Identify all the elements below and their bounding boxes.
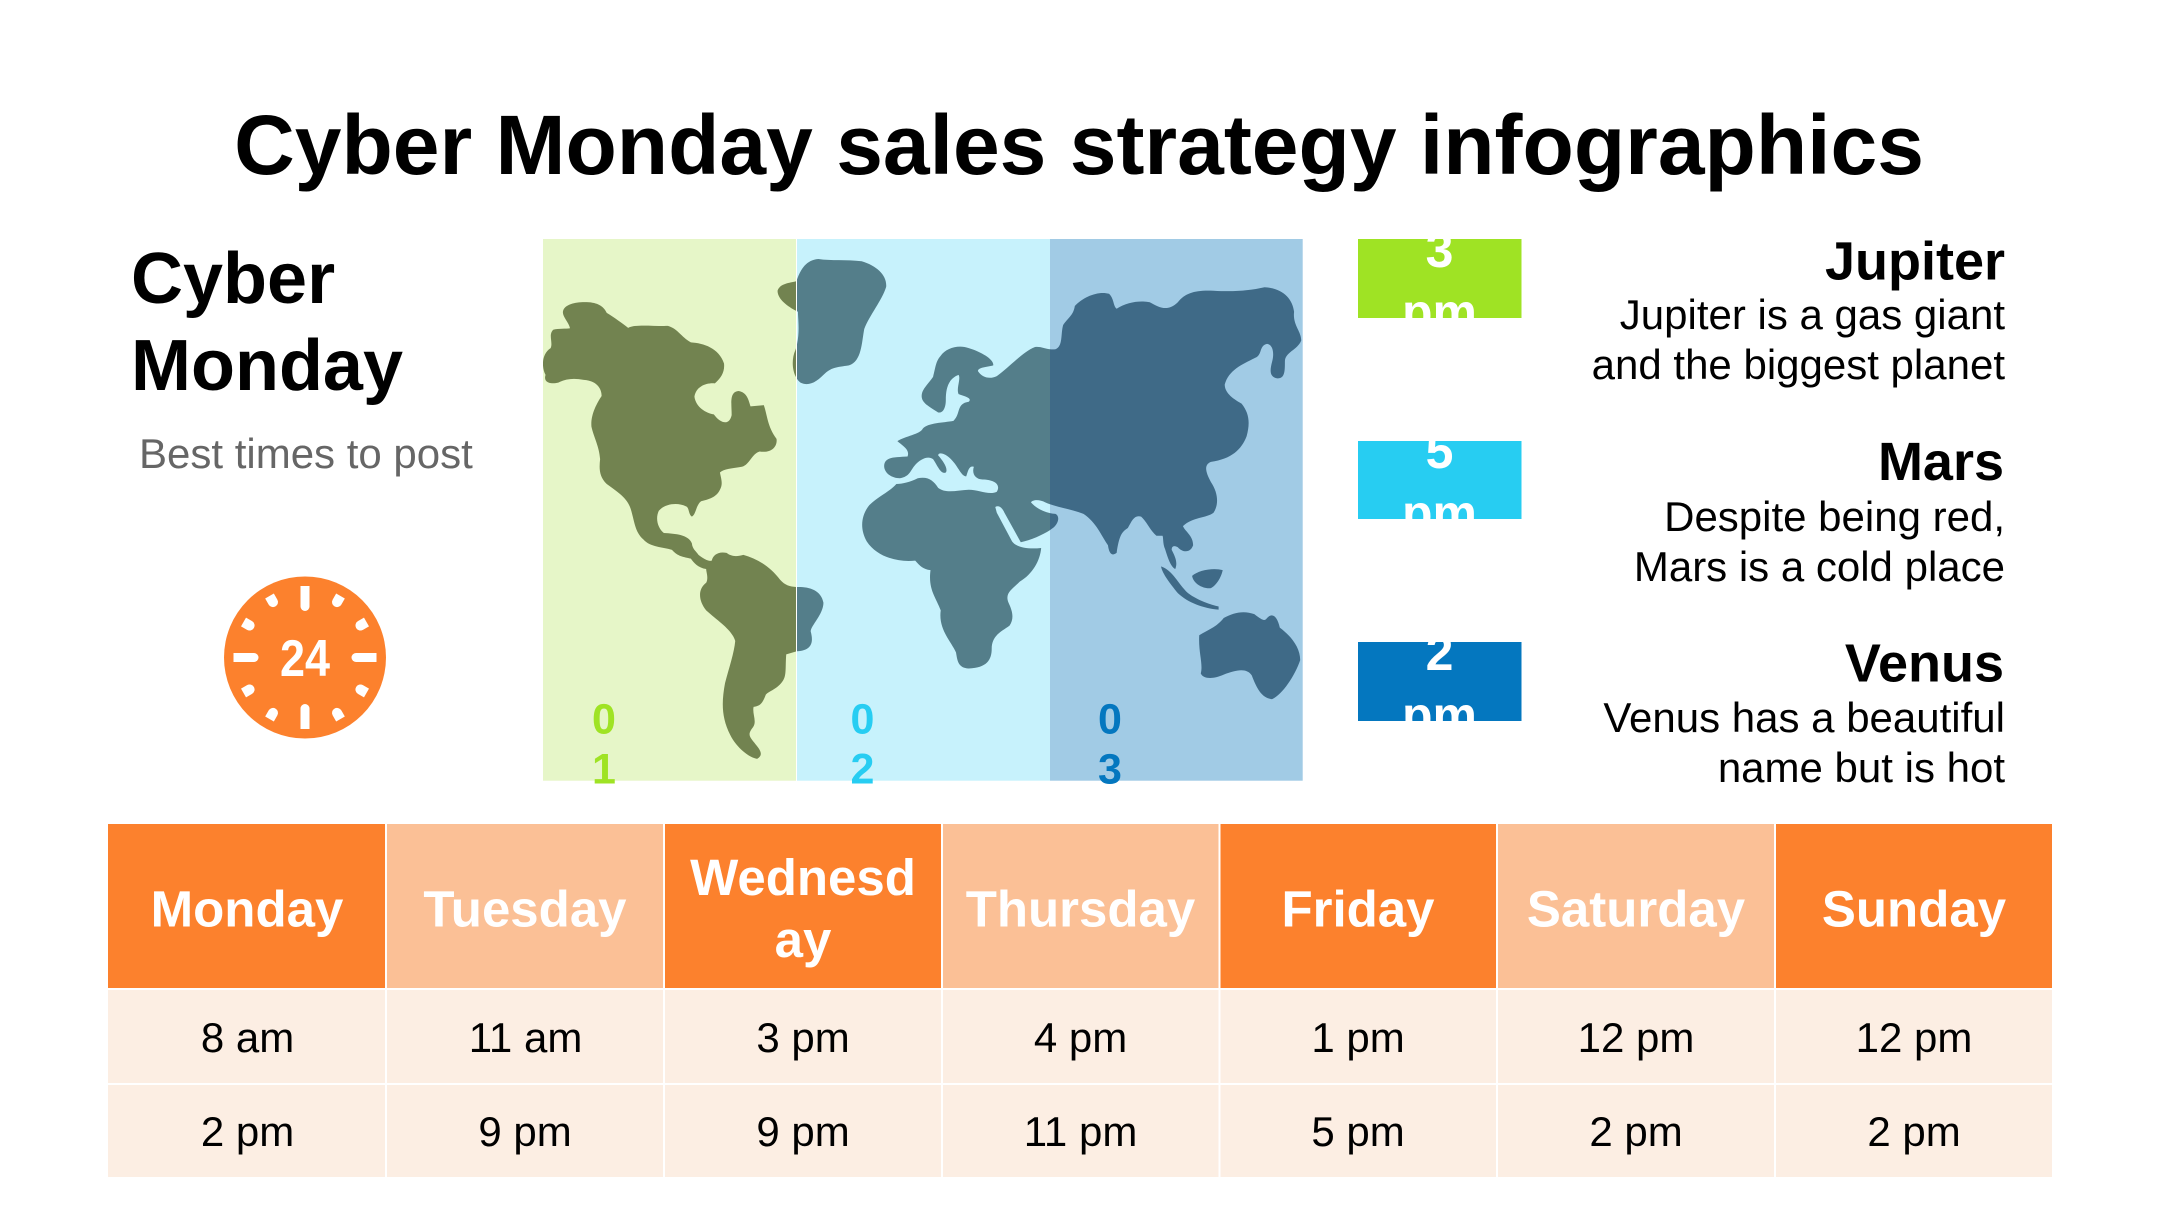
column: Thursday — [943, 824, 1218, 1177]
time tag: 2 pm — [1358, 642, 1522, 721]
column: Tuesday: Tuesday — [423, 880, 627, 938]
panel: Mars — [1358, 441, 2004, 590]
column: Wednesday: 3 pm — [756, 1014, 850, 1061]
heading: Cyber Monday: Monday — [131, 326, 403, 406]
column: Friday — [1220, 824, 1496, 1177]
column: Friday: Friday — [1281, 880, 1435, 938]
column: Wednesday — [665, 824, 941, 1177]
column: Tuesday — [387, 824, 663, 1177]
subtitle: best times to post: Best times to post — [139, 430, 473, 477]
zone label 01: 0 — [592, 696, 616, 744]
column: Wednesday: ay — [775, 911, 832, 968]
column: Wednesday: 9 pm — [756, 1108, 850, 1155]
Venus description: name but is hot — [1718, 744, 2005, 791]
column: Saturday — [1498, 824, 1774, 1177]
column: Sunday: 12 pm — [1856, 1014, 1972, 1061]
column: Friday: 5 pm — [1311, 1108, 1405, 1155]
Mars description: Mars is a cold place — [1634, 543, 2005, 590]
time tag: 5 pm — [1358, 441, 1522, 519]
column: Wednesday: Wednesd — [690, 849, 916, 906]
column: Sunday — [1776, 824, 2052, 1177]
Mars name: Mars — [1878, 432, 2004, 492]
time tag: 5 pm: pm — [1402, 485, 1477, 541]
time tag: 5 pm: 5 — [1426, 423, 1453, 479]
column: Saturday: 2 pm — [1589, 1108, 1683, 1155]
column: Monday: Monday — [151, 880, 344, 938]
time tag: 2 pm: 2 — [1426, 625, 1453, 681]
world map: zone 01 part — [543, 281, 796, 759]
column: Tuesday: 11 am — [469, 1014, 582, 1061]
column: Monday — [108, 824, 385, 1177]
column: Friday: 1 pm — [1311, 1014, 1405, 1061]
zone label 02: 2 — [851, 746, 874, 794]
column: Saturday: 12 pm — [1578, 1014, 1694, 1061]
Mars description: Despite being red, — [1664, 493, 2005, 540]
column: Sunday: 2 pm — [1867, 1108, 1961, 1155]
time tag: 3 pm: 3 — [1426, 222, 1453, 278]
panel: Jupiter — [1358, 239, 2005, 388]
icon: 24 hour clock — [224, 576, 386, 738]
title: Cyber Monday sales strategy infographics — [234, 98, 1924, 192]
time tag: 3 pm: pm — [1402, 284, 1477, 340]
zone strip 02 — [797, 239, 1050, 781]
panel: world map with time zones — [543, 239, 1303, 794]
panel: Venus — [1358, 642, 2005, 782]
zone strip 01 — [543, 239, 796, 781]
column: Tuesday: 9 pm — [478, 1108, 572, 1155]
Jupiter description: Jupiter is a gas giant — [1620, 291, 2005, 338]
world map: zone 03 part — [1050, 287, 1302, 700]
icon: 24 hour clock: 24 — [280, 630, 330, 688]
column: Saturday: Saturday — [1527, 880, 1746, 938]
column: Monday: 2 pm — [201, 1108, 294, 1155]
Jupiter description: and the biggest planet — [1592, 341, 2005, 388]
Jupiter name: Jupiter — [1825, 232, 2005, 292]
zone label 02: 0 — [851, 696, 874, 744]
Venus name: Venus — [1845, 634, 2004, 694]
zone label 03: 3 — [1098, 746, 1122, 794]
table: best posting times per weekday — [108, 824, 2052, 1177]
zone label 01: 1 — [592, 746, 616, 794]
column: Sunday: Sunday — [1822, 880, 2007, 938]
Venus description: Venus has a beautiful — [1603, 694, 2005, 741]
heading: Cyber Monday: Cyber — [131, 239, 335, 319]
world map: zone 02 part — [797, 259, 1050, 668]
zone label 03: 0 — [1098, 696, 1122, 744]
zone strip 03 — [1050, 239, 1303, 781]
time tag: 2 pm: pm — [1402, 687, 1477, 743]
time tag: 3 pm — [1358, 239, 1522, 318]
column: Monday: 8 am — [201, 1014, 294, 1061]
column: Thursday: Thursday — [966, 880, 1196, 938]
column: Thursday: 11 pm — [1024, 1108, 1137, 1155]
column: Thursday: 4 pm — [1034, 1014, 1127, 1061]
